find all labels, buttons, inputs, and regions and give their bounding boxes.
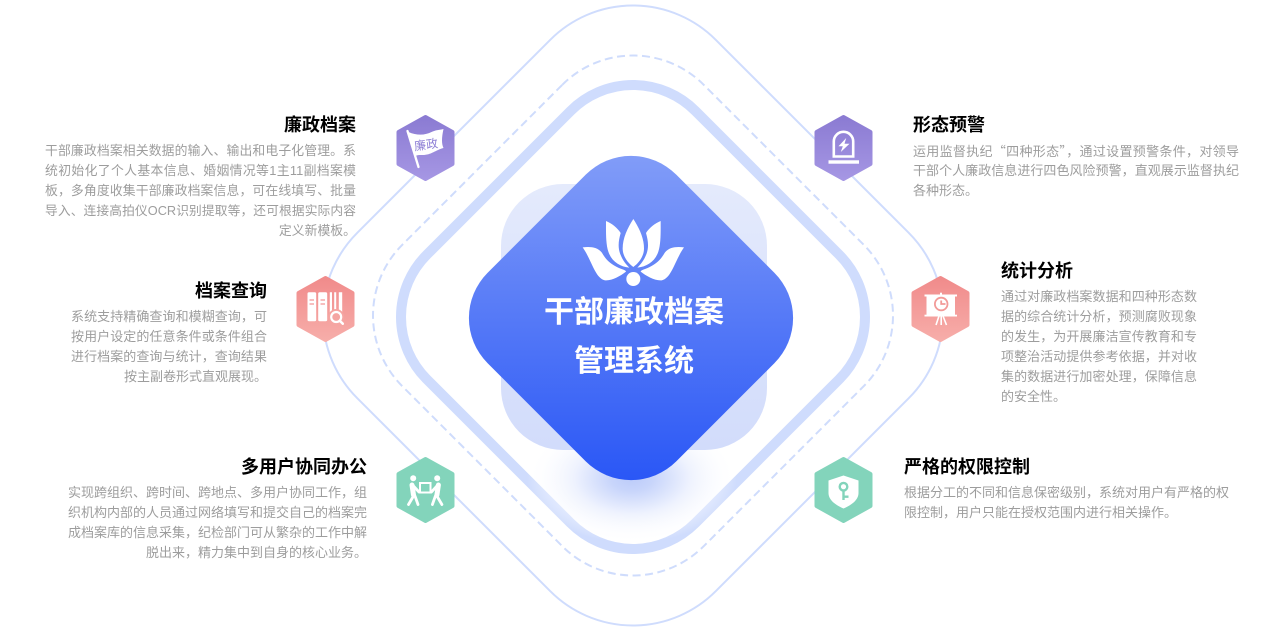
text block: 严格的权限控制: [904, 457, 1229, 520]
text block: 档案查询: 进行档案的查询与统计，查询结果: [71, 349, 267, 364]
icon: flag hexagon: [398, 117, 452, 179]
text block: 统计分析: 的安全性。: [1001, 389, 1066, 404]
icon: shield with key hexagon: [816, 459, 870, 521]
text block: 统计分析: 通过对廉政档案数据和四种形态数: [1001, 289, 1197, 304]
glow under central diamond: [527, 413, 737, 543]
text block: 统计分析: [1001, 261, 1197, 404]
icon: people carrying box hexagon: [398, 459, 452, 521]
text block: 形态预警: [913, 115, 1239, 198]
icon: flag hexagon: 廉政: [413, 134, 439, 154]
text block: 统计分析: 的发生，为开展廉洁宣传教育和专: [1001, 329, 1197, 344]
text block: 档案查询: [71, 281, 267, 384]
text block: 廉政档案: 廉政档案: [284, 115, 356, 135]
text block: 廉政档案: 导入、连接高拍仪OCR识别提取等，还可根据实际内容: [45, 203, 356, 218]
text block: 形态预警: 干部个人廉政信息进行四色风险预警，直观展示监督执纪: [913, 163, 1239, 178]
text block: 形态预警: 各种形态。: [913, 183, 978, 198]
text block: 多用户协同办公: 实现跨组织、跨时间、跨地点、多用户协同工作，组: [68, 485, 367, 500]
text block: 档案查询: 档案查询: [195, 281, 267, 301]
icon: presentation board hexagon: [914, 278, 968, 340]
icon: books and magnifier hexagon: [298, 278, 352, 340]
text block: 多用户协同办公: [68, 457, 367, 560]
text block: 严格的权限控制: 根据分工的不同和信息保密级别，系统对用户有严格的权: [904, 485, 1229, 500]
text block: 廉政档案: 板，多角度收集干部廉政档案信息，可在线填写、批量: [45, 183, 356, 198]
text block: 廉政档案: 统初始化了个人基本信息、婚姻情况等1主11副档案模: [45, 163, 356, 178]
text block: 档案查询: 按用户设定的任意条件或条件组合: [71, 329, 267, 344]
text block: 档案查询: 系统支持精确查询和模糊查询，可: [71, 309, 267, 324]
dashed diamond ring: [373, 56, 893, 575]
text block: 廉政档案: 干部廉政档案相关数据的输入、输出和电子化管理。系: [45, 143, 356, 158]
central title: 管理系统: [574, 345, 694, 378]
text block: 统计分析: 统计分析: [1001, 261, 1073, 281]
text block: 多用户协同办公: 多用户协同办公: [241, 457, 367, 477]
outer diamond ring: [323, 6, 943, 625]
central title: [544, 296, 724, 378]
text block: 统计分析: 项整治活动提供参考依据，并对收: [1001, 349, 1197, 364]
text block: 廉政档案: 定义新模板。: [279, 223, 356, 238]
text block: 廉政档案: [45, 115, 356, 238]
icon: lotus logo: [583, 219, 684, 286]
text block: 形态预警: 运用监督执纪“四种形态”，通过设置预警条件，对领导: [913, 141, 1239, 160]
central blue diamond: [469, 156, 793, 480]
light rounded square: [501, 184, 767, 450]
text block: 严格的权限控制: 限控制，用户只能在授权范围内进行相关操作。: [904, 505, 1177, 520]
text block: 统计分析: 据的综合统计分析，预测腐败现象: [1001, 309, 1197, 324]
text block: 多用户协同办公: 成档案库的信息采集，纪检部门可从繁杂的工作中解: [68, 525, 367, 540]
text block: 多用户协同办公: 脱出来，精力集中到自身的核心业务。: [146, 545, 367, 560]
central title: 干部廉政档案: [544, 296, 724, 329]
icon: tombstone with bolt hexagon: [816, 117, 870, 179]
text block: 严格的权限控制: 严格的权限控制: [904, 457, 1030, 477]
text block: 档案查询: 按主副卷形式直观展现。: [124, 369, 267, 384]
text block: 多用户协同办公: 织机构内部的人员通过网络填写和提交自己的档案完: [68, 505, 367, 520]
text block: 统计分析: 集的数据进行加密处理，保障信息: [1001, 369, 1197, 384]
thick diamond ring: [401, 85, 865, 549]
text block: 形态预警: 形态预警: [913, 115, 985, 135]
